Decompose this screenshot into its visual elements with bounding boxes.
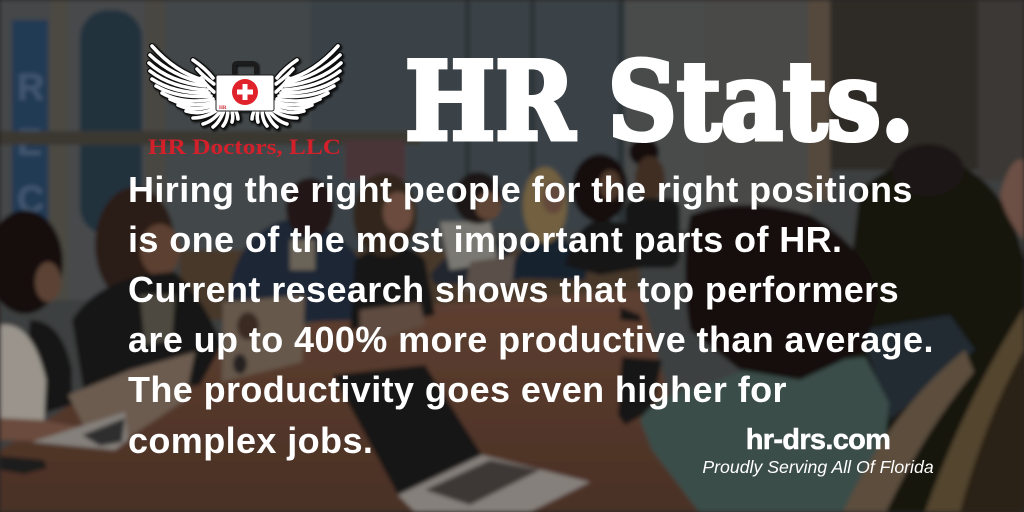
foreground person [640,357,889,512]
icon: left wing [149,46,238,127]
chairs behind table [180,250,640,320]
woman 4 [350,245,435,330]
body text: The productivity goes even higher for [128,369,787,410]
woman 5 [430,239,520,285]
icon: right wing [252,46,341,127]
icon: medical case [216,63,274,111]
website and tagline: Proudly Serving All Of Florida [702,457,934,477]
woman 2 [95,187,175,303]
title: HR Stats. [405,39,914,165]
logo: winged medical case with company name [146,43,346,159]
laptops and table items [222,295,305,382]
website and tagline [702,424,934,477]
body text: complex jobs. [128,420,373,461]
right group: dark hair and backs [840,157,1024,512]
body text [128,169,934,461]
body text: Current research shows that top performers [128,269,899,310]
chairs foreground [843,350,974,512]
background photo: team around a conference table: R [17,67,44,109]
body text: Hiring the right people for the right positions [128,169,913,210]
body text: are up to 400% more productive than average. [128,319,934,360]
background photo: team around a conference table: C [17,179,44,221]
man 3 [228,220,360,325]
woman 6 blonde [508,235,590,280]
logo name: HR Doctors, LLC [148,134,341,159]
woman 1 [20,320,72,420]
table [0,290,700,512]
background photo: team around a conference table: E [17,122,42,164]
woman 7 and 8 [565,220,680,275]
icon: medical case: HR [219,106,227,111]
website and tagline: hr-drs.com [746,424,890,456]
body text: is one of the most important parts of HR. [128,219,842,260]
